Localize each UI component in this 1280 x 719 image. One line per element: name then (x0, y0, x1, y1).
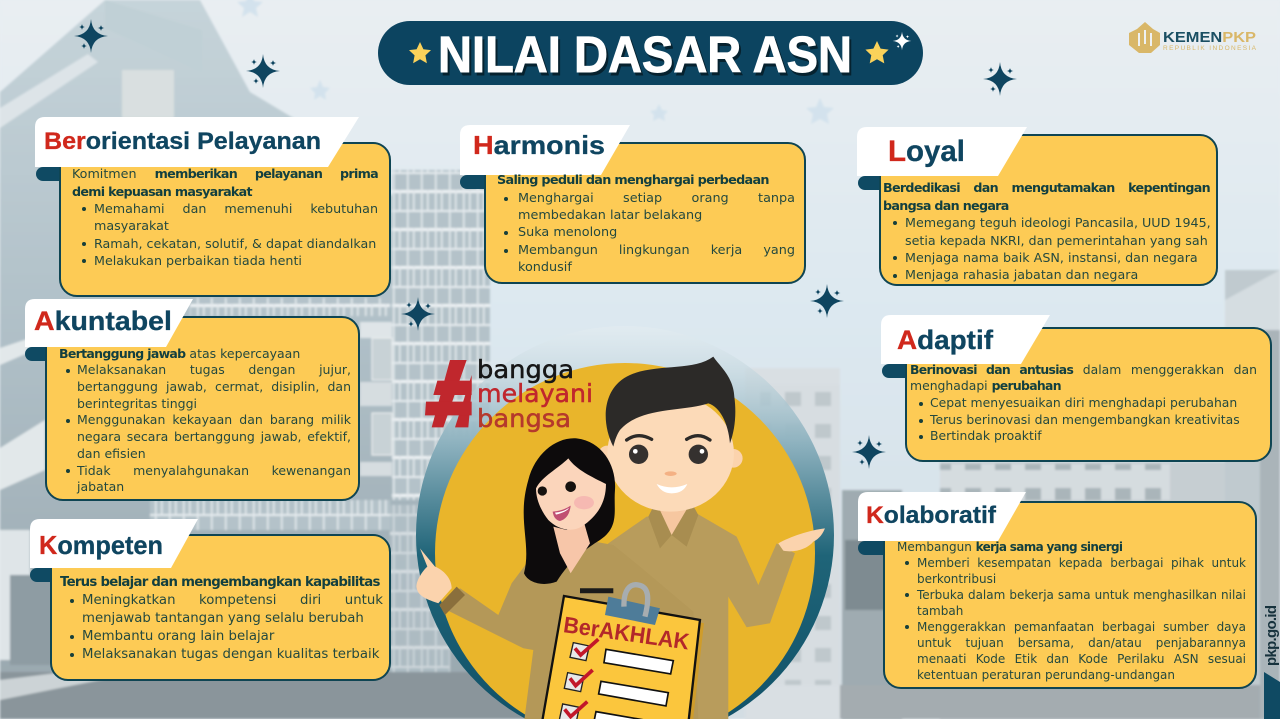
text: Loyal (883, 180, 1211, 282)
text: Adaptif: Cepat menyesuaikan diri menghadapi perubahan (930, 395, 1237, 410)
woman (416, 438, 700, 719)
text: Kolaboratif: menaati Kode Etik dan Kode Perilaku ASN sesuai (917, 652, 1246, 666)
icon: star (865, 41, 889, 63)
panel: Berorientasi Pelayanan (35, 117, 391, 297)
text: Kolaboratif: untuk tujuan bersama, dan/atau penjabarannya (917, 636, 1246, 650)
KemenPKP logo: KEMEN PKP (1163, 29, 1256, 46)
sparkle icons (74, 19, 1017, 469)
clipboard with BerAKHLAK checklist (537, 585, 704, 719)
man (567, 357, 825, 719)
panel: Akuntabel (25, 299, 360, 501)
text: Kompeten (60, 575, 383, 662)
text: Akuntabel: negara secara bertanggung jawab, efektif, (77, 429, 351, 444)
heading: Kompeten: Kompeten (39, 530, 163, 560)
text: Kolaboratif: tambah (917, 604, 963, 618)
left building mass (0, 0, 490, 719)
text: Berorientasi Pelayanan (72, 166, 378, 268)
text: Berorientasi Pelayanan: Memahami dan memenuhi kebutuhan (94, 201, 378, 216)
panel: Adaptif (881, 315, 1272, 462)
text: Kolaboratif (897, 540, 1246, 682)
text: Akuntabel: Bertanggung jawab atas kepercayaan (59, 346, 300, 361)
text: Kolaboratif: berkontribusi (917, 572, 996, 586)
heading: Loyal: Loyal (888, 135, 965, 168)
text: Akuntabel: berintegritas tinggi (77, 396, 197, 411)
heading: Adaptif: Adaptif (897, 325, 994, 355)
text: Loyal: Berdedikasi dan mengutamakan kepentingan (883, 180, 1210, 195)
title text: NILAI DASAR ASN (438, 26, 852, 83)
corner accent (1264, 672, 1280, 719)
text: Kolaboratif: Memberi kesempatan kepada berbagai pihak untuk (917, 556, 1246, 570)
text: Kolaboratif: Menggerakkan pemanfaatan berbagai sumber daya (917, 620, 1246, 634)
text: Harmonis: Membangun lingkungan kerja yang (518, 243, 795, 258)
text: Kompeten: Meningkatkan kompetensi diri untuk (82, 593, 383, 608)
heading: Akuntabel: Akuntabel (34, 306, 172, 336)
text: Berorientasi Pelayanan: Komitmen memberikan pelayanan prima (72, 166, 378, 181)
heading: Kompeten (30, 519, 198, 568)
text: Adaptif: menghadapi perubahan (910, 378, 1061, 393)
text: Harmonis: kondusif (518, 260, 572, 275)
text: Kompeten: Membantu orang lain belajar (82, 629, 274, 644)
text: Loyal: Menjaga rahasia jabatan dan negara (905, 267, 1138, 282)
text: Loyal: setia kepada NKRI, dan pemerintahan yang sah (905, 233, 1208, 248)
heading: Berorientasi Pelayanan (35, 117, 359, 167)
heading: Kolaboratif (858, 492, 1026, 541)
heading: Harmonis (460, 125, 630, 175)
KemenPKP logo (1129, 22, 1257, 53)
#banggamelayanibangsa logo (425, 355, 593, 433)
#banggamelayanibangsa logo: melayani (477, 379, 593, 408)
text: Harmonis: membedakan latar belakang (518, 208, 702, 223)
text: Akuntabel: Menggunakan kekayaan dan barang milik (77, 412, 351, 427)
characters (416, 357, 825, 719)
text: Akuntabel: jabatan (77, 479, 124, 494)
text: Adaptif: Terus berinovasi dan mengembangkan kreativitas (930, 412, 1240, 427)
text: Adaptif (910, 362, 1257, 443)
heading: Loyal (857, 127, 1027, 176)
circle backdrop (416, 326, 834, 719)
panel: Kolaboratif (858, 492, 1257, 689)
icon: star (409, 42, 431, 63)
text: Kolaboratif: Terbuka dalam bekerja sama untuk menghasilkan nilai (917, 588, 1246, 602)
text: Akuntabel: dan efisien (77, 446, 146, 461)
text: Harmonis (497, 173, 795, 275)
text: Berorientasi Pelayanan: Ramah, cekatan, solutif, & dapat diandalkan (94, 236, 376, 251)
text: Adaptif: Bertindak proaktif (930, 428, 1042, 443)
panel: Loyal (857, 127, 1218, 286)
text: Kolaboratif: Membangun kerja sama yang sinergi (897, 540, 1122, 554)
text: Berorientasi Pelayanan: demi kepuasan masyarakat (72, 184, 252, 199)
text: Akuntabel: Melaksanakan tugas dengan jujur, (77, 362, 351, 377)
text: Akuntabel (59, 346, 351, 494)
title pill (378, 21, 923, 85)
text: Harmonis: Saling peduli dan menghargai perbedaan (497, 173, 769, 188)
#banggamelayanibangsa logo: bangga (477, 355, 574, 384)
KemenPKP logo: REPUBLIK INDONESIA (1163, 45, 1257, 52)
heading: Akuntabel (25, 299, 193, 347)
text: Kolaboratif: ketentuan peraturan perundang-undangan (917, 668, 1175, 682)
heading: Adaptif (881, 315, 1050, 364)
text: Akuntabel: bertanggung jawab, cermat, disiplin, dan (77, 379, 351, 394)
berakhlak label: BerAKHLAK (562, 611, 692, 655)
heading: Berorientasi Pelayanan: Berorientasi Pelayanan (44, 128, 321, 155)
heading: Harmonis: Harmonis (473, 130, 605, 160)
text: Kompeten: Terus belajar dan mengembangkan kapabilitas (60, 575, 380, 590)
panel: Harmonis (460, 125, 806, 284)
right buildings (745, 368, 840, 719)
text: Berorientasi Pelayanan: Melakukan perbaikan tiada henti (94, 253, 302, 268)
text: Kompeten: menjawab tantangan yang selalu berubah (82, 611, 364, 626)
text: Kompeten: Melaksanakan tugas dengan kualitas terbaik (82, 647, 379, 662)
text: Loyal: bangsa dan negara (883, 198, 1009, 213)
text: Akuntabel: Tidak menyalahgunakan kewenangan (77, 463, 351, 478)
faint stars (237, 0, 834, 124)
#banggamelayanibangsa logo: bangsa (477, 404, 571, 433)
text: Berorientasi Pelayanan: masyarakat (94, 218, 169, 233)
text: Harmonis: Menghargai setiap orang tanpa (518, 191, 795, 206)
text: Adaptif: Berinovasi dan antusias dalam menggerakkan dan (910, 362, 1257, 377)
text: Harmonis: Suka menolong (518, 225, 617, 240)
text: Loyal: Menjaga nama baik ASN, instansi, dan negara (905, 250, 1198, 265)
heading: Kolaboratif: Kolaboratif (866, 502, 997, 529)
panel: Kompeten (30, 519, 391, 681)
text: Loyal: Memegang teguh ideologi Pancasila, UUD 1945, (905, 215, 1211, 230)
website label: pkp.go.id (1263, 605, 1280, 666)
